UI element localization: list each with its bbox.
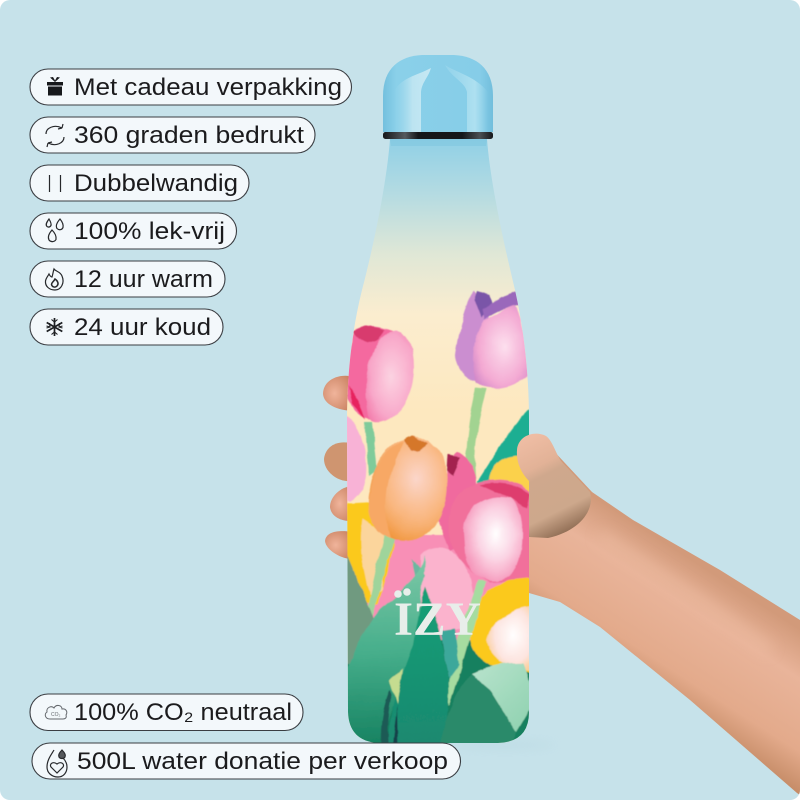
cap left highlight [394, 68, 431, 132]
icon: double wall [50, 175, 60, 192]
orange tulip [368, 436, 447, 541]
bottom right dark leaf [440, 674, 516, 743]
teal small leaf [441, 628, 460, 680]
yellow bloom left [342, 502, 395, 605]
left pink petal [347, 416, 367, 503]
pill: 100% CO2 neutraal: 100% CO₂ neutraal [74, 699, 292, 726]
pill: 500L water donatie per verkoop: 500L water donatie per verkoop [77, 748, 448, 775]
purple tulip [455, 291, 528, 388]
pill: Met cadeau verpakking [30, 69, 352, 105]
arm highlight [600, 535, 770, 650]
icon: snowflake [46, 318, 62, 336]
icon: flame [45, 269, 63, 290]
thumb over bottle [517, 434, 591, 538]
pill: 12 uur warm [30, 261, 225, 297]
center dark leaf [385, 587, 449, 750]
cap right highlight [445, 65, 488, 132]
cap [383, 55, 493, 139]
bottle [340, 55, 535, 750]
icon: gift [47, 77, 63, 96]
pill: Met cadeau verpakking: Met cadeau verpakking [74, 74, 342, 101]
orange stem [367, 534, 396, 618]
cap ring [383, 132, 493, 139]
icon: rotate arrows [46, 124, 64, 147]
grey-green leaf [348, 554, 374, 665]
yellow bloom behind [488, 454, 529, 492]
pink background mass [420, 548, 478, 632]
pill: 100% lek-vrij [30, 213, 236, 249]
arm and hand [527, 447, 800, 795]
pink tulip center right [454, 478, 529, 583]
magenta tulip [438, 452, 478, 552]
tulip artwork [340, 291, 535, 750]
pill: 500L water donatie per verkoop [32, 743, 460, 779]
pill: 360 graden bedrukt [30, 117, 315, 153]
pill: Dubbelwandig: Dubbelwandig [74, 170, 238, 197]
pill: 100% CO2 neutraal [30, 694, 303, 730]
icon: CO2 cloud [45, 705, 67, 719]
icon: drops [46, 219, 63, 242]
pink tulip top left [346, 326, 413, 422]
stems [467, 388, 487, 480]
logo: IZY [394, 593, 481, 646]
pill: 24 uur koud: 24 uur koud [74, 314, 211, 341]
bottom right light leaf [470, 663, 535, 732]
pill: Dubbelwandig [30, 165, 249, 201]
pill: 100% lek-vrij: 100% lek-vrij [74, 218, 225, 245]
right stem [448, 580, 486, 705]
fingers [323, 376, 354, 559]
teal leaf top right [476, 408, 529, 484]
pill: 360 graden bedrukt: 360 graden bedrukt [74, 122, 304, 149]
bottle body with gradient [347, 139, 529, 743]
base fill lower bottle [366, 534, 506, 641]
big left leaf [348, 555, 426, 734]
light leaf accent [390, 668, 403, 705]
icon: water drop with heart [47, 750, 67, 777]
neck shading [390, 139, 487, 146]
bottle shadow [455, 740, 555, 750]
pill: 12 uur warm: 12 uur warm [74, 266, 213, 293]
yellow tulip right [470, 578, 535, 673]
pill: 24 uur koud [30, 309, 223, 345]
icon: CO2 cloud: CO₂ [51, 712, 60, 718]
